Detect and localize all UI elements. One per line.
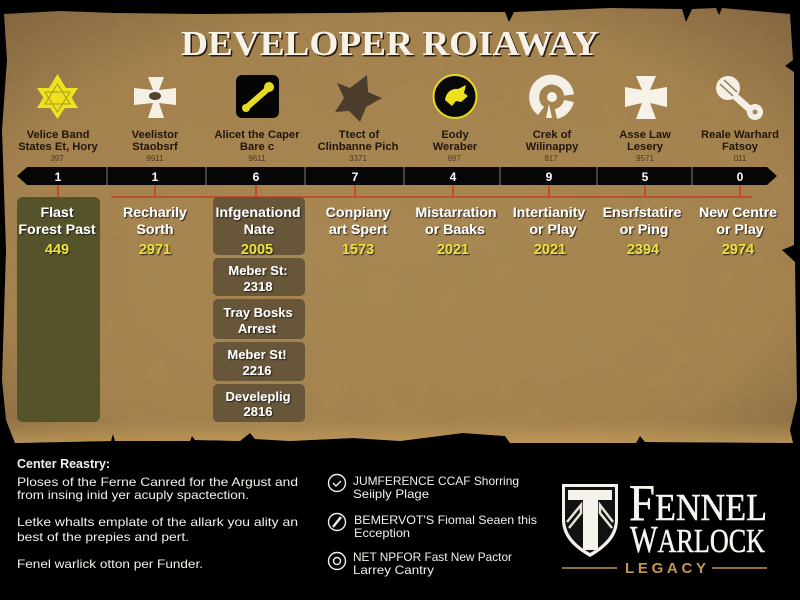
panel: stacked brown column: 2816: [244, 404, 272, 419]
icon: wrench on black tile: [236, 75, 279, 118]
column: Ensrfstatire or Ping: Ensrfstatire: [603, 205, 682, 221]
timeline bar: 9: [546, 170, 553, 184]
footer text block: [17, 457, 298, 571]
column labels: 3371: [349, 154, 367, 163]
footer text block: Center Reastry:: [17, 457, 110, 471]
logo: Fennel Warlock Legacy: WARLOCK: [630, 519, 765, 561]
icon: yellow hexagram: [37, 74, 78, 119]
column labels: [18, 129, 779, 163]
footer text block: Ploses of the Ferne Canred for the Argust and: [17, 475, 298, 489]
panel: stacked brown column: [213, 197, 305, 422]
red connectors: [58, 185, 752, 197]
column: New Centre or Play: 2974: [722, 242, 754, 258]
parchment background: [2, 8, 797, 443]
panel: stacked brown column: 2005: [241, 242, 273, 258]
column: Recharily Sorth: 2971: [139, 242, 171, 258]
panel: stacked brown column: Meber St:: [228, 263, 288, 278]
column: Intertianity or Play: 2021: [534, 242, 566, 258]
icon: white cross: [134, 77, 176, 118]
icon: at sign circle: [328, 552, 346, 570]
panel: olive first column: 449: [45, 242, 69, 258]
footer list: JUMFERENCE CCAF Shorring: [353, 474, 519, 488]
timeline bar: 7: [352, 170, 359, 184]
timeline bar: 5: [642, 170, 649, 184]
timeline bar: 4: [450, 170, 457, 184]
panel: stacked brown column: 2216: [243, 363, 271, 378]
column: Conpiany art Spert: [326, 205, 390, 258]
column labels: Eody: [441, 129, 469, 141]
column: Recharily Sorth: [123, 205, 187, 258]
icon: white mace: [716, 76, 763, 120]
footer list: [328, 474, 537, 577]
logo: Fennel Warlock Legacy: [562, 475, 767, 577]
panel: stacked brown column: Infgenationd: [215, 205, 301, 221]
column labels: Ttect of: [339, 129, 379, 141]
column labels: Weraber: [433, 141, 478, 153]
timeline bar: 1: [55, 170, 62, 184]
column labels: Bare c: [240, 141, 274, 153]
timeline bar: 1: [152, 170, 159, 184]
column labels: States Et, Hory: [18, 141, 99, 153]
column: Intertianity or Play: or Play: [529, 222, 577, 238]
column: New Centre or Play: [699, 205, 777, 258]
footer text block: best of the prepies and pert.: [17, 530, 189, 544]
icon: white cross pattee: [625, 76, 667, 119]
column labels: Wilinappy: [526, 141, 579, 153]
footer list: Seiiply Plage: [353, 487, 429, 501]
column: Conpiany art Spert: Conpiany: [326, 205, 390, 221]
panel: stacked brown column: Nate: [244, 222, 274, 238]
logo: Fennel Warlock Legacy: FENNEL: [629, 475, 767, 532]
column: Ensrfstatire or Ping: 2394: [627, 242, 659, 258]
column: Mistarration or Baaks: or Baaks: [425, 222, 485, 238]
logo: Fennel Warlock Legacy: LEGACY: [625, 560, 706, 577]
column: Mistarration or Baaks: Mistarration: [415, 205, 497, 221]
column labels: 817: [544, 154, 558, 163]
icon: yellow beast badge: [434, 75, 476, 118]
column: Intertianity or Play: [513, 205, 585, 258]
column: New Centre or Play: New Centre: [699, 205, 777, 221]
timeline bar: 0: [737, 170, 744, 184]
footer list: Ecception: [354, 526, 410, 540]
column labels: 697: [447, 154, 461, 163]
column labels: 9911: [146, 154, 164, 163]
footer text block: Letke whalts emplate of the allark you ality an: [17, 515, 298, 529]
column: Ensrfstatire or Ping: or Ping: [620, 222, 668, 238]
icon: dark star: [335, 75, 382, 122]
column labels: Veelistor: [132, 129, 179, 141]
column: Recharily Sorth: Sorth: [136, 222, 174, 238]
icon: shield: [562, 484, 618, 557]
panel: olive first column: [17, 197, 100, 422]
column labels: Clinbanne Pich: [318, 141, 399, 153]
column labels: Lesery: [627, 141, 664, 153]
column labels: 011: [734, 154, 747, 163]
footer list: Larrey Cantry: [353, 563, 434, 577]
column: Mistarration or Baaks: 2021: [437, 242, 469, 258]
column labels: Reale Warhard: [701, 129, 779, 141]
panel: olive first column: Forest Past: [18, 222, 96, 238]
title: DEVELOPER ROIAWAY: [181, 24, 599, 63]
icon: white ring: [534, 80, 569, 118]
column labels: Staobsrf: [132, 141, 178, 153]
column: Conpiany art Spert: 1573: [342, 242, 374, 258]
icon: wrench circle: [328, 514, 346, 530]
panel: stacked brown column: Develeplig: [225, 389, 291, 404]
panel: stacked brown column: 2318: [244, 279, 272, 294]
panel: stacked brown column: Arrest: [238, 321, 277, 336]
footer list: NET NPFOR Fast New Pactor: [353, 550, 512, 564]
column labels: Fatsoy: [722, 141, 759, 153]
panel: stacked brown column: Tray Bosks: [223, 305, 293, 320]
column: Intertianity or Play: Intertianity: [513, 205, 585, 221]
column: Mistarration or Baaks: [415, 205, 497, 258]
column: New Centre or Play: or Play: [716, 222, 764, 238]
column labels: 9571: [636, 154, 654, 163]
icon: check circle: [328, 474, 346, 492]
column labels: Velice Band: [27, 129, 90, 141]
panel: olive first column: Flast: [40, 205, 74, 221]
timeline bar: 6: [253, 170, 260, 184]
panel: stacked brown column: Meber St!: [227, 347, 287, 362]
column labels: 397: [50, 154, 64, 163]
column labels: 9611: [248, 154, 266, 163]
column labels: Alicet the Caper: [214, 129, 300, 141]
column labels: Crek of: [533, 129, 572, 141]
footer text block: from insing inid yer acuply spactection.: [17, 488, 249, 502]
column: Recharily Sorth: Recharily: [123, 205, 187, 221]
footer list: BEMERVOT'S Fiomal Seaen this: [354, 513, 537, 527]
column: Conpiany art Spert: art Spert: [329, 222, 387, 238]
column labels: Asse Law: [619, 129, 671, 141]
column: Ensrfstatire or Ping: [603, 205, 682, 258]
timeline bar: [17, 167, 777, 185]
footer text block: Fenel warlick otton per Funder.: [17, 557, 203, 571]
